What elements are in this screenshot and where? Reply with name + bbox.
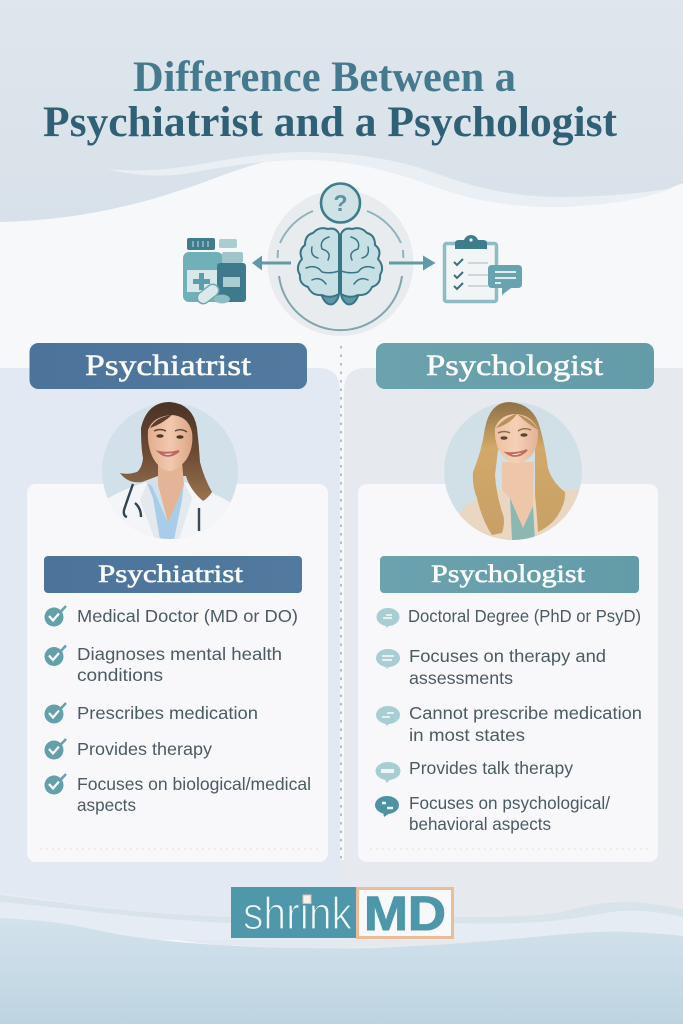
header pill: psychologist — [376, 343, 654, 389]
footer wave strip — [0, 895, 683, 924]
icon: question mark: ? — [333, 190, 348, 216]
arrow: right to clipboard — [389, 256, 436, 270]
item: biological: Focuses on biological/medical — [77, 774, 311, 794]
item: medical doctor: Medical Doctor (MD or DO) — [77, 606, 298, 626]
header pill: psychologist: Psychologist — [426, 349, 604, 382]
item: therapy and assessments — [376, 646, 606, 688]
card: psychiatrist — [27, 484, 328, 862]
list: psychiatrist — [44, 606, 311, 815]
header pill: psychiatrist: Psychiatrist — [85, 349, 252, 382]
logo: shrinkMD: MD — [364, 888, 446, 941]
item: diagnoses — [44, 644, 282, 685]
item: psychological: behavioral aspects — [409, 814, 551, 834]
logo: shrinkMD — [231, 887, 452, 941]
icon: medication bottles — [183, 238, 246, 306]
item: therapy and assessments: assessments — [409, 668, 513, 688]
footer wave band — [0, 893, 683, 940]
arrow: left to medication — [252, 256, 291, 270]
header pill: psychiatrist — [30, 343, 307, 389]
item: diagnoses: Diagnoses mental health — [77, 644, 282, 664]
item: biological: aspects — [77, 795, 136, 815]
item: biological — [44, 774, 311, 815]
portrait: psychiatrist — [102, 402, 238, 545]
item: talk therapy: Provides talk therapy — [409, 758, 573, 778]
item: psychological: Focuses on psychological/ — [409, 793, 610, 813]
item: doctoral degree: Doctoral Degree (PhD or PsyD) — [408, 606, 641, 626]
icon: brain — [298, 228, 382, 304]
central diagram: brain with question mark — [268, 184, 414, 336]
card: psychologist — [358, 484, 658, 862]
title: Difference Between a — [133, 54, 516, 101]
sub-heading bar: psychiatrist: Psychiatrist — [98, 561, 243, 588]
item: therapy and assessments: Focuses on therapy and — [409, 646, 606, 666]
sub-heading bar: psychologist: Psychologist — [431, 561, 585, 588]
divider — [340, 346, 342, 860]
item: therapy: Provides therapy — [77, 739, 212, 759]
panel: psychologist background — [344, 368, 683, 948]
card footer dots: psychologist — [370, 848, 648, 850]
item: cannot prescribe — [376, 703, 642, 745]
item: cannot prescribe: Cannot prescribe medication — [409, 703, 642, 723]
panel: psychiatrist background — [0, 368, 340, 950]
item: cannot prescribe: in most states — [409, 725, 525, 745]
icon: clipboard with chat bubble — [444, 235, 522, 302]
card footer dots: psychiatrist — [40, 848, 318, 850]
item: talk therapy — [376, 758, 573, 783]
item: prescribes: Prescribes medication — [77, 703, 258, 723]
header wave highlight — [107, 152, 672, 207]
title — [43, 54, 618, 146]
sub-heading bar: psychologist — [380, 556, 639, 593]
sub-heading bar: psychiatrist — [44, 556, 302, 593]
portrait: psychologist — [444, 402, 582, 545]
top header wave — [0, 0, 683, 222]
title: Psychiatrist and a Psychologist — [43, 99, 618, 146]
item: diagnoses: conditions — [77, 665, 163, 685]
item: psychological — [375, 793, 610, 834]
footer wave — [0, 918, 683, 1024]
list: psychologist — [375, 606, 642, 834]
logo: shrinkMD: shrink — [243, 888, 352, 939]
icon: question mark — [321, 184, 360, 222]
panel join below cards — [338, 860, 346, 950]
